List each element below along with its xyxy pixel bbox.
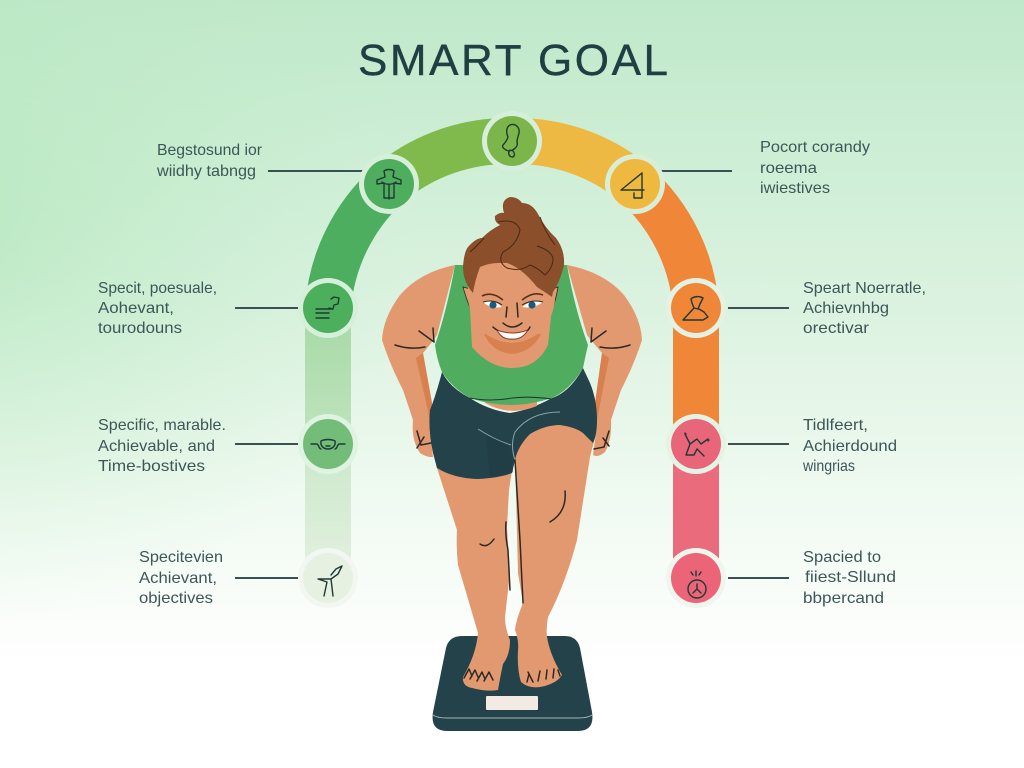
label: left two (98, 280, 217, 337)
icon: bird figure (318, 566, 342, 596)
icon: head (503, 124, 519, 157)
label: top left: wiidhy tabngg (156, 163, 256, 180)
chest skin (468, 270, 556, 368)
scale display (486, 696, 538, 710)
nose (503, 303, 522, 327)
node: left two (298, 278, 358, 338)
eyebrows (482, 294, 543, 300)
node: left three (298, 414, 358, 474)
label: top right: roeema (760, 160, 817, 177)
label: left three: Time-bostives (98, 458, 205, 475)
label: right four (803, 549, 896, 607)
label: right three (802, 417, 897, 475)
node: right two (666, 278, 726, 338)
label: right two: orectivar (803, 320, 870, 337)
label: right two: Achievnhbg (803, 300, 889, 317)
title: SMART GOAL (358, 36, 668, 85)
shorts (429, 368, 597, 479)
knee and leg lines (480, 460, 565, 603)
label: top left (156, 142, 263, 180)
arms (382, 265, 642, 457)
label: right four: fiiest-Sllund (805, 569, 896, 586)
node: right three (666, 414, 726, 474)
icon: number four (621, 173, 644, 198)
hair strands (470, 217, 555, 275)
label: left three (98, 417, 226, 475)
label: left two: tourodouns (98, 320, 182, 337)
icon: lotus (311, 440, 345, 449)
hair (463, 197, 564, 297)
icon: exercise (685, 433, 709, 456)
label: right two: Speart Noerratle, (803, 280, 926, 297)
arch: progress track (305, 141, 719, 578)
label: left four (139, 549, 223, 607)
label: right four: Spacied to (803, 549, 881, 566)
belly skin (485, 400, 537, 411)
label: left three: Specific, marable. (98, 417, 226, 434)
label: top right: Pocort corandy (760, 139, 870, 156)
node: right four (666, 548, 726, 608)
label: right four: bbpercand (803, 590, 884, 607)
icon: stretch (683, 297, 708, 320)
label: left four: Achievant, (139, 570, 217, 587)
left leg (436, 465, 512, 691)
ears (463, 287, 558, 313)
node: left four (298, 548, 358, 608)
shorts fold (486, 435, 513, 477)
label: right three: Achierdound (803, 438, 897, 455)
icon: figure (377, 170, 401, 199)
label: top right: iwiestives (760, 180, 830, 197)
label: left three: Achievable, and (98, 438, 215, 455)
label: right three: Tidlfeert, (803, 417, 868, 434)
shorts seams (478, 412, 560, 460)
person (382, 197, 642, 691)
right leg (515, 420, 597, 687)
arm creases (395, 328, 630, 348)
label: left two: Specit, poesuale, (98, 280, 217, 297)
toes (464, 669, 560, 682)
label: right three: wingrias (802, 458, 855, 475)
smile (497, 330, 528, 339)
face (468, 262, 555, 343)
node: top centre (482, 111, 542, 171)
node: top right (605, 154, 665, 214)
label: left two: Aohevant, (98, 300, 174, 317)
chin shadow (484, 334, 541, 354)
eyes (483, 301, 543, 309)
arm shadows (416, 353, 609, 420)
green tank top (435, 265, 588, 405)
icon: runner (316, 297, 339, 318)
bathroom scale (433, 636, 592, 731)
label: left four: objectives (139, 590, 213, 607)
tank hem (470, 397, 552, 400)
label: top left: Begstosund ior (157, 142, 263, 159)
hand creases (417, 431, 609, 449)
node: top left (359, 154, 419, 214)
label: left four: Specitevien (139, 549, 223, 566)
label: right two (803, 280, 926, 337)
label: top right (760, 139, 870, 197)
connector lines (235, 171, 789, 578)
icon: stopwatch (688, 571, 706, 598)
